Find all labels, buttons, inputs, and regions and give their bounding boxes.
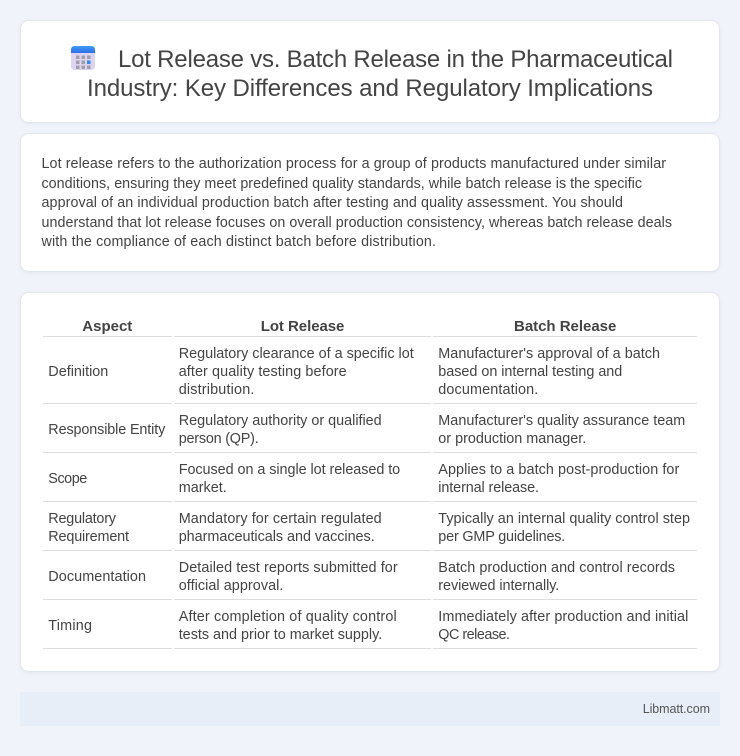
- text block: introduction paragraph: Lot release refers to the authorization process for a group of products manufactured under similar: [42, 156, 666, 172]
- title: [87, 46, 673, 102]
- table row: Scope: internal release.: [438, 480, 539, 496]
- title: Industry: Key Differences and Regulatory Implications: [87, 75, 653, 102]
- table row: Regulatory Requirement: Typically an internal quality control step: [438, 511, 690, 527]
- table row: Documentation: reviewed internally.: [438, 578, 559, 594]
- panel: title card: [20, 20, 720, 122]
- table header row: Aspect: [82, 318, 132, 335]
- table row: Documentation: Batch production and control records: [438, 560, 675, 576]
- table row: Timing: After completion of quality control: [179, 609, 397, 625]
- table row: Scope: Applies to a batch post-production for: [438, 462, 680, 478]
- table row: Regulatory Requirement: [43, 511, 697, 550]
- table row: Definition: [43, 346, 697, 404]
- table header row: Batch Release: [514, 318, 616, 335]
- text block: introduction paragraph: approval of an individual production batch after testing and quality assessment. You should: [42, 195, 623, 211]
- table row: Responsible Entity: [43, 413, 697, 452]
- table row: Documentation: Detailed test reports submitted for: [179, 560, 398, 576]
- table row: Regulatory Requirement: Regulatory: [48, 511, 117, 527]
- table row: Definition: distribution.: [179, 382, 254, 398]
- panel: comparison table: [20, 292, 720, 672]
- text block: introduction paragraph: conditions, ensuring they meet predefined quality standards, while batch release is the specific: [42, 176, 642, 192]
- text block: introduction paragraph: [40, 156, 672, 250]
- table row: Regulatory Requirement: Mandatory for certain regulated: [179, 511, 382, 527]
- table row: Timing: [43, 609, 697, 648]
- table row: Scope: [43, 462, 697, 502]
- table row: Regulatory Requirement: pharmaceuticals and vaccines.: [179, 529, 375, 545]
- text block: introduction paragraph: understand that lot release focuses on overall production consistency, whereas batch release deals: [42, 215, 672, 231]
- table row: Definition: based on internal testing and: [438, 364, 622, 380]
- table row: Timing: Immediately after production and initial: [438, 609, 688, 625]
- table row: Definition: documentation.: [438, 382, 538, 398]
- table row: Responsible Entity: Responsible Entity: [48, 422, 166, 438]
- panel: introduction: [20, 134, 720, 272]
- table row: Definition: Manufacturer's approval of a batch: [438, 346, 660, 362]
- title: Lot Release vs. Batch Release in the Pharmaceutical: [118, 46, 673, 73]
- table header row: Lot Release: [261, 318, 344, 335]
- table row: Documentation: official approval.: [179, 578, 283, 594]
- table row: Timing: Timing: [48, 618, 92, 634]
- table row: Definition: Regulatory clearance of a specific lot: [179, 346, 414, 362]
- footer: [20, 692, 720, 726]
- footer: Libmatt.com: [643, 702, 710, 716]
- text block: introduction paragraph: with the compliance of each distinct batch before distribution.: [40, 234, 436, 250]
- table row: Documentation: Documentation: [48, 569, 146, 585]
- table row: Scope: Scope: [48, 471, 87, 487]
- table row: Scope: Focused on a single lot released to: [179, 462, 400, 478]
- table row: Responsible Entity: person (QP).: [179, 431, 259, 447]
- table row: Scope: market.: [179, 480, 227, 496]
- table row: Responsible Entity: Manufacturer's quality assurance team: [438, 413, 685, 429]
- table row: Timing: QC release.: [438, 627, 510, 643]
- table row: Responsible Entity: Regulatory authority or qualified: [179, 413, 382, 429]
- table row: Documentation: [43, 560, 697, 600]
- table header row: [43, 318, 697, 336]
- table row: Responsible Entity: or production manager.: [438, 431, 586, 447]
- table row: Regulatory Requirement: Requirement: [48, 529, 129, 545]
- table row: Timing: tests and prior to market supply.: [179, 627, 382, 643]
- table row: Definition: after quality testing before: [179, 364, 347, 380]
- icon: calendar: [71, 46, 95, 70]
- table row: Definition: Definition: [48, 364, 108, 380]
- table row: Regulatory Requirement: per GMP guidelines.: [438, 529, 565, 545]
